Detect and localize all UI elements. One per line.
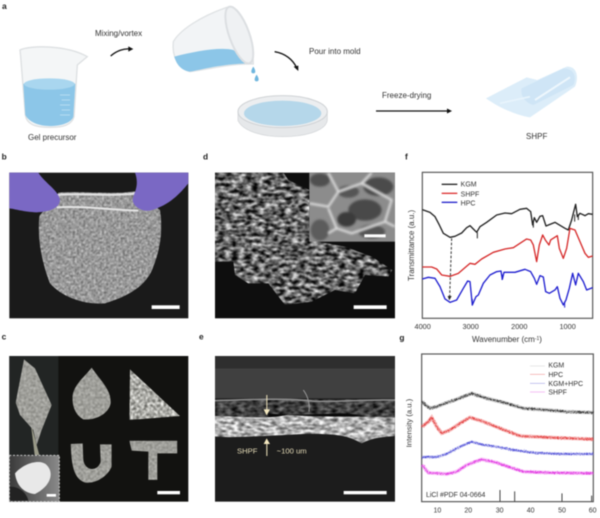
plot frame <box>422 172 593 318</box>
SHPF curve <box>422 459 593 474</box>
legend: SHPF <box>461 191 479 198</box>
HPC curve <box>422 417 593 439</box>
film cross-section band <box>215 415 395 443</box>
legend: KGM+HPC <box>548 381 583 388</box>
panel g: XRD chart <box>399 333 597 514</box>
text: Mixing/vortex: Mixing/vortex <box>95 29 142 38</box>
film fold highlight <box>57 193 138 211</box>
text: thickness: ~100 um <box>277 446 307 455</box>
SEM background <box>215 356 395 502</box>
KGM+HPC curve <box>422 442 593 457</box>
peak arrows <box>472 214 578 308</box>
label e: e <box>199 332 204 342</box>
scale bar <box>344 491 387 494</box>
porous foam <box>215 173 392 305</box>
legend: SHPF <box>548 390 567 397</box>
LiCl reference <box>426 490 592 502</box>
panel f: FTIR chart <box>405 152 593 331</box>
right glove <box>133 173 188 211</box>
x axis title f: -1 <box>535 336 540 342</box>
film <box>39 191 161 304</box>
label g: g <box>399 333 404 343</box>
scale bar <box>152 305 180 309</box>
LiCl reference: LiCl #PDF 04-0664 <box>426 492 486 499</box>
arrow: pour <box>275 52 298 71</box>
text: Freeze-drying: Freeze-drying <box>382 91 431 100</box>
x axis title f: ) <box>539 335 542 344</box>
legend: KGM <box>461 182 477 189</box>
legend: HPC <box>548 372 563 379</box>
inset SEM magnified pores <box>309 173 395 242</box>
upper substrate <box>215 356 395 368</box>
x tick labels: 50 <box>558 507 566 514</box>
panel d: SEM porous structure <box>203 152 395 318</box>
label d: d <box>203 152 208 162</box>
text: Gel precursor: Gel precursor <box>28 133 77 142</box>
arrow: mixing <box>111 46 133 56</box>
icon: petri dish mold <box>238 96 327 137</box>
x tick labels: 10 <box>433 507 441 514</box>
KGM curve <box>422 204 593 237</box>
x tick labels: 4000 <box>415 322 431 331</box>
photo background <box>9 356 188 502</box>
arrow: freeze-drying <box>376 108 452 114</box>
panel c: shaped films <box>2 332 188 502</box>
scale bar <box>157 491 180 494</box>
leaf shape <box>16 359 52 445</box>
icon: pouring cup <box>173 3 259 81</box>
label b: b <box>2 152 7 162</box>
x tick labels: 60 <box>589 507 597 514</box>
label f: f <box>405 152 408 162</box>
KGM curve <box>422 393 593 413</box>
x tick labels: 3000 <box>463 322 479 331</box>
icon: beaker with gel precursor <box>20 47 87 127</box>
left glove <box>9 173 60 212</box>
rear film layer <box>215 399 395 418</box>
x tick labels <box>415 322 576 331</box>
legend <box>530 363 583 397</box>
legend: HPC <box>461 200 475 207</box>
legend <box>442 182 479 207</box>
label c: c <box>2 332 7 342</box>
HPC curve halo <box>422 417 593 439</box>
x tick labels: 30 <box>496 507 504 514</box>
SHPF curve <box>422 228 593 276</box>
text: SHPF: SHPF <box>526 132 547 141</box>
stem <box>31 423 39 455</box>
x tick labels <box>433 507 597 514</box>
photo background <box>9 173 188 318</box>
label a: a <box>2 1 7 11</box>
text: Pour into mold: Pour into mold <box>309 47 361 56</box>
inset SEM <box>9 455 59 502</box>
T shape <box>129 441 177 480</box>
plot frame <box>422 354 593 502</box>
U shape <box>71 443 112 483</box>
scale bar <box>354 305 387 309</box>
x tick labels: 1000 <box>559 322 576 331</box>
KGM+HPC curve halo <box>422 442 593 457</box>
KGM curve halo <box>422 393 593 413</box>
panel e: SEM cross-section <box>199 332 395 502</box>
triangle shape <box>129 369 180 420</box>
x tick labels: 40 <box>527 507 535 514</box>
y axis title: Intensity (a.u.) <box>404 398 413 447</box>
HPC curve <box>422 269 593 305</box>
icon: SHPF film <box>486 67 577 117</box>
legend: KGM <box>548 363 564 370</box>
arrows <box>264 395 270 456</box>
x tick labels: 2000 <box>511 322 527 331</box>
y axis title: Transmittance (a.u.) <box>407 210 416 281</box>
panel a: fabrication process <box>2 1 577 142</box>
teardrop shape <box>72 368 111 420</box>
dashed guide arrow <box>448 238 452 300</box>
SHPF curve halo <box>422 459 593 474</box>
text: SHPF: SHPF <box>237 446 258 455</box>
SEM background <box>215 173 395 318</box>
x tick labels: 20 <box>464 507 472 514</box>
panel b: film held with gloves <box>2 152 188 318</box>
x axis title f: Wavenumber (cm <box>472 335 535 344</box>
leaf background <box>9 356 58 456</box>
